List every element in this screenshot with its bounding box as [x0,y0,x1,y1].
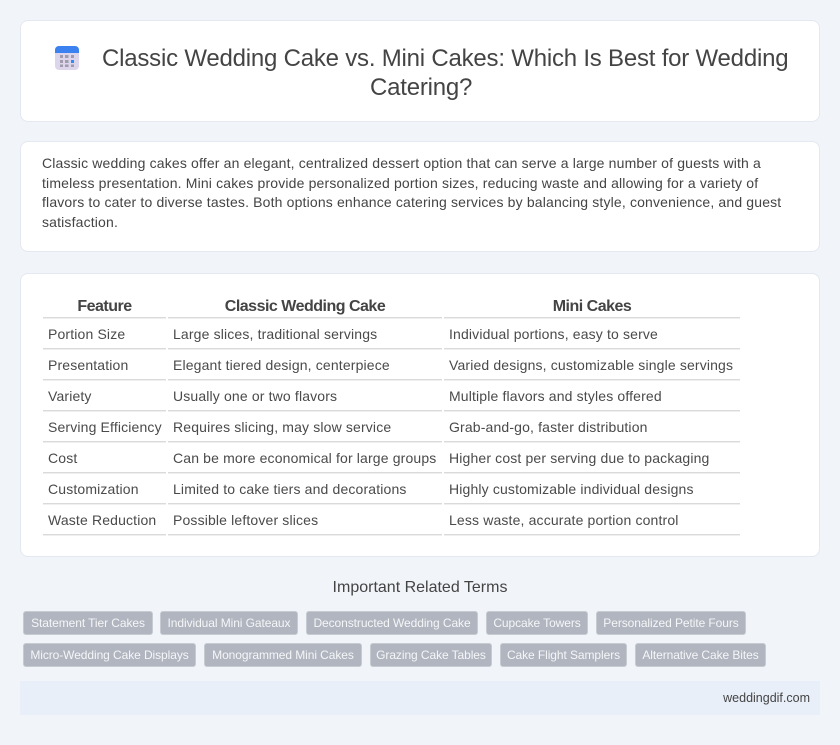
tag [23,611,153,635]
tag: Alternative Cake Bites [642,648,759,662]
row: cost: Higher cost per serving due to packaging [449,450,709,466]
panel: intro text [20,141,820,252]
tag: Personalized Petite Fours [603,616,739,630]
row: portion size: Portion Size [48,326,125,342]
tag [370,643,492,667]
title: Classic Wedding Cake vs. Mini Cakes: Which Is Best for Wedding [102,45,788,72]
panel: comparison table [20,273,820,557]
row: waste reduction: Less waste, accurate portion control [449,512,679,528]
tag: Cake Flight Samplers [507,648,620,662]
table header: Classic Wedding Cake [225,298,385,315]
comparison table [43,298,740,536]
tag: Grazing Cake Tables [376,648,486,662]
tag: Micro-Wedding Cake Displays [30,648,189,662]
intro paragraph: satisfaction. [42,214,118,230]
row: waste reduction: Waste Reduction [48,512,156,528]
title: Catering? [370,74,472,101]
tag [596,611,746,635]
tag: Monogrammed Mini Cakes [212,648,354,662]
tag: Statement Tier Cakes [31,616,145,630]
footer source: weddingdif.com [723,691,810,705]
tag [160,611,298,635]
tag: Individual Mini Gateaux [168,616,290,630]
row: presentation: Varied designs, customizable single servings [449,357,733,373]
tag [500,643,627,667]
tag [306,611,478,635]
row: cost: Can be more economical for large groups [173,450,436,466]
row: waste reduction: Possible leftover slices [173,512,318,528]
tag: Deconstructed Wedding Cake [313,616,471,630]
row: presentation: Elegant tiered design, centerpiece [173,357,390,373]
row: cost [48,450,709,466]
row: serving efficiency [48,419,648,435]
row: variety: Multiple flavors and styles offered [449,388,662,404]
row: customization [48,481,694,497]
tag: Cupcake Towers [493,616,581,630]
row: cost: Cost [48,450,77,466]
footer bar [20,681,820,715]
row: customization: Customization [48,481,139,497]
row: presentation: Presentation [48,357,128,373]
title [102,45,788,101]
table header [77,298,632,315]
panel: title card [20,20,820,122]
row: variety [48,388,662,404]
table header: Mini Cakes [553,298,631,315]
row: presentation [48,357,733,373]
intro paragraph: flavors to cater to diverse tastes. Both options enhance catering services by balancing style, convenience, and guest [42,194,781,210]
heading: related terms: Important Related Terms [333,579,507,596]
intro paragraph: Classic wedding cakes offer an elegant, centralized dessert option that can serve a large number of guests with a [42,155,761,171]
row: portion size: Individual portions, easy to serve [449,326,658,342]
tag [23,643,196,667]
row: portion size: Large slices, traditional servings [173,326,377,342]
table header: Feature [77,298,132,315]
tag group [23,611,766,667]
icon: calendar [55,46,79,70]
row: serving efficiency: Requires slicing, may slow service [173,419,391,435]
row: variety: Variety [48,388,92,404]
row: serving efficiency: Serving Efficiency [48,419,162,435]
tag [204,643,362,667]
intro paragraph [42,155,782,230]
tag [635,643,766,667]
tag [486,611,588,635]
row: customization: Highly customizable individual designs [449,481,694,497]
intro paragraph: timeless presentation. Mini cakes provide personalized portion sizes, reducing waste and allowing for a variety of [42,174,758,190]
row: serving efficiency: Grab-and-go, faster distribution [449,419,648,435]
row: waste reduction [48,512,679,528]
row: variety: Usually one or two flavors [173,388,337,404]
row: customization: Limited to cake tiers and decorations [173,481,407,497]
row: portion size [48,326,658,342]
